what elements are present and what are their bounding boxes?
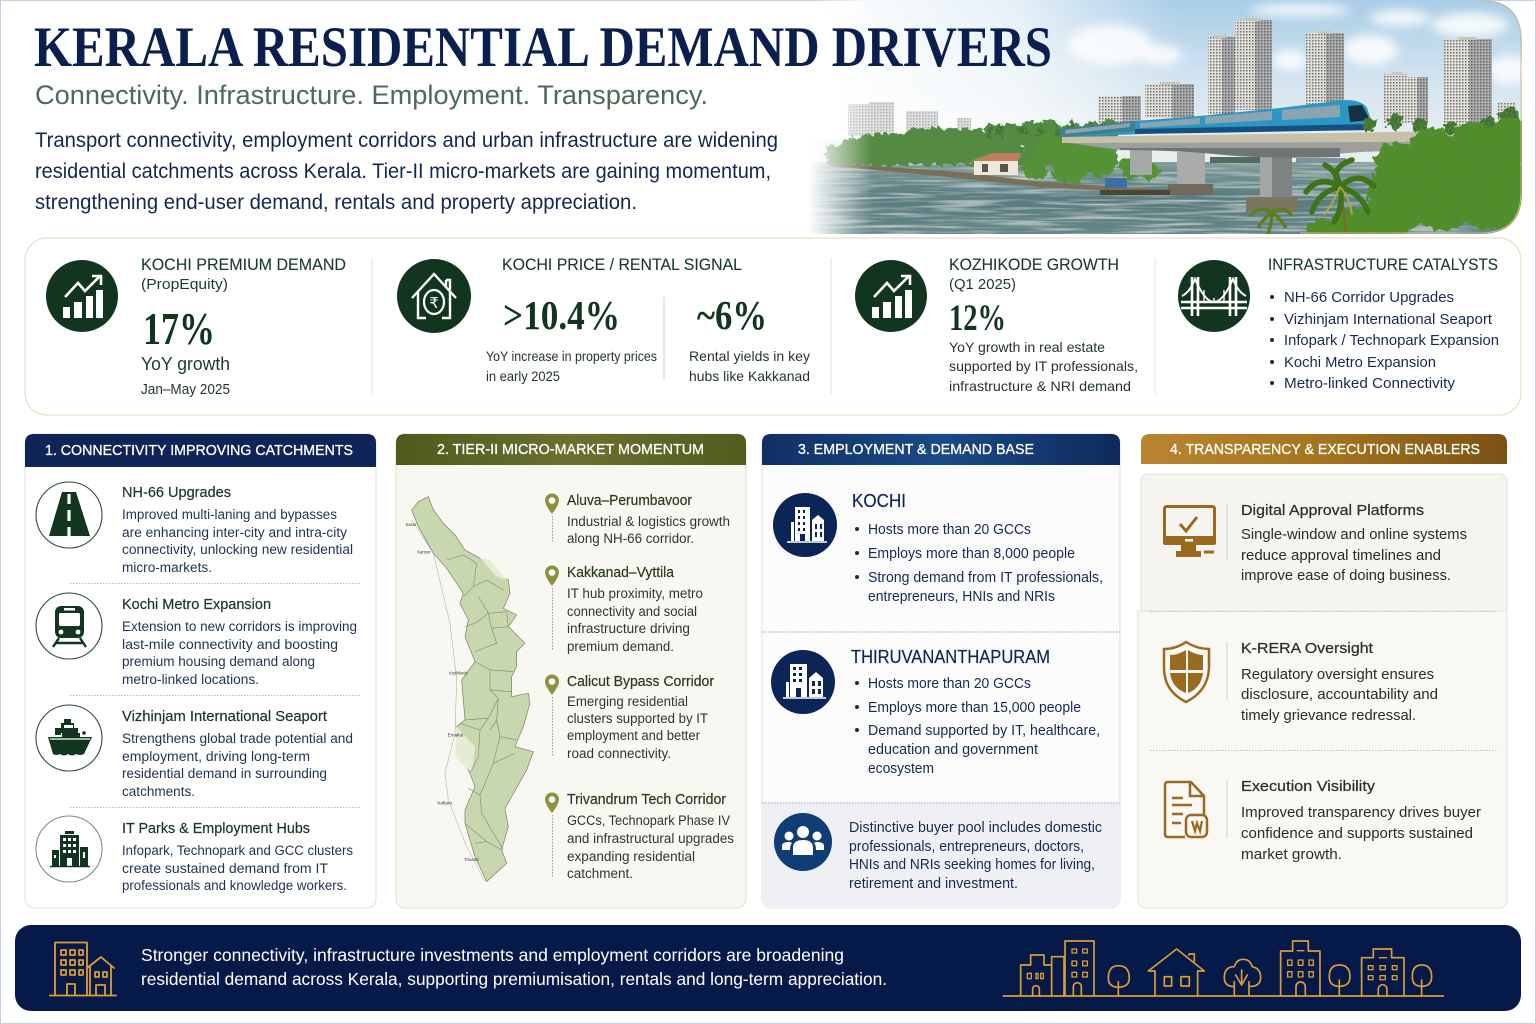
panel 1: connectivity improving catchments bbox=[25, 434, 376, 908]
item: Kakkanad-Vyttila: infrastructure driving bbox=[567, 621, 690, 636]
item: digital approval platforms: Single-window and online systems bbox=[1241, 526, 1467, 543]
KPI: infrastructure catalysts: Vizhinjam International Seaport bbox=[1284, 311, 1493, 328]
icon: location pin bbox=[545, 566, 559, 651]
subtitle: Connectivity. Infrastructure. Employment. Transparency. bbox=[35, 80, 708, 110]
map of Kerala: Kozhikode bbox=[449, 670, 468, 676]
map of Kerala: Ernakul bbox=[448, 732, 463, 738]
item: Kakkanad-Vyttila: IT hub proximity, metro bbox=[567, 586, 703, 601]
icon: growth chart bbox=[855, 260, 927, 332]
item: Vizhinjam international seaport: employment, driving long-term bbox=[122, 749, 310, 764]
panel 2: Tier-II micro-market momentum bbox=[396, 434, 746, 908]
item: Aluva-Perumbavoor: Aluva–Perumbavoor bbox=[567, 493, 692, 509]
section: distinctive buyer pool: retirement and investment. bbox=[849, 876, 1018, 892]
item: Vizhinjam international seaport: catchments. bbox=[122, 784, 195, 799]
KPI: Kozhikode growth: KOZHIKODE GROWTH bbox=[949, 255, 1119, 274]
title: KERALA RESIDENTIAL DEMAND DRIVERS bbox=[34, 16, 1052, 79]
panel 1 heading: 1. CONNECTIVITY IMPROVING CATCHMENTS bbox=[45, 442, 353, 459]
section: Thiruvananthapuram: education and government bbox=[868, 742, 1038, 758]
item: Kakkanad-Vyttila: connectivity and social bbox=[567, 604, 697, 619]
section: distinctive buyer pool: Distinctive buyer pool includes domestic bbox=[849, 820, 1102, 836]
KPI: infrastructure catalysts: Kochi Metro Expansion bbox=[1284, 354, 1436, 371]
intro paragraph: strengthening end-user demand, rentals and property appreciation. bbox=[35, 191, 637, 214]
item: Calicut bypass corridor: Calicut Bypass Corridor bbox=[567, 674, 714, 690]
KPI: Kochi price and rental signal: ~6% bbox=[697, 292, 767, 338]
section: Thiruvananthapuram: Hosts more than 20 GCCs bbox=[868, 676, 1031, 692]
map of Kerala: Kasar bbox=[406, 522, 417, 528]
icon: house with rupee bbox=[397, 259, 471, 333]
panel 4 heading bbox=[1141, 434, 1507, 464]
section: Thiruvananthapuram: ecosystem bbox=[868, 761, 934, 777]
item: NH-66 upgrades: connectivity, unlocking new residential bbox=[122, 542, 353, 557]
footer message bbox=[141, 945, 887, 989]
icon: location pin bbox=[545, 793, 559, 878]
KPI: Kochi premium demand: KOCHI PREMIUM DEMAND bbox=[141, 255, 346, 274]
item: K-RERA oversight: timely grievance redressal. bbox=[1241, 707, 1416, 724]
item: IT parks and employment hubs bbox=[36, 816, 353, 893]
KPI: Kochi premium demand: YoY growth bbox=[141, 354, 230, 374]
panel 3 heading: 3. EMPLOYMENT & DEMAND BASE bbox=[798, 441, 1034, 458]
KPI: infrastructure catalysts: Metro-linked Connectivity bbox=[1284, 375, 1455, 392]
item: NH-66 upgrades: Improved multi-laning and bypasses bbox=[122, 507, 337, 522]
KPI: Kochi price and rental signal: hubs like Kakkanad bbox=[689, 368, 810, 384]
KPI: Kozhikode growth: supported by IT professionals, bbox=[949, 358, 1138, 374]
item: Kochi metro expansion: Extension to new corridors is improving bbox=[122, 619, 357, 634]
section: Kochi: KOCHI bbox=[852, 491, 906, 511]
item: Trivandrum tech corridor bbox=[545, 792, 734, 881]
item: Trivandrum tech corridor: catchment. bbox=[567, 866, 633, 881]
footer banner bbox=[15, 925, 1521, 1011]
KPI: Kochi price and rental signal: in early 2025 bbox=[486, 368, 560, 384]
item: Vizhinjam international seaport: residential demand in surrounding bbox=[122, 766, 327, 781]
item: Calicut bypass corridor: employment and better bbox=[567, 728, 700, 743]
item: NH-66 upgrades: micro-markets. bbox=[122, 560, 212, 575]
KPI: Kozhikode growth bbox=[855, 255, 1138, 394]
section: Kochi: Strong demand from IT professionals, bbox=[868, 570, 1103, 586]
item: Aluva-Perumbavoor bbox=[545, 493, 730, 546]
section: Kochi: entrepreneurs, HNIs and NRIs bbox=[868, 589, 1055, 605]
KPI: Kochi price and rental signal: >10.4% bbox=[503, 292, 620, 338]
icon: road bbox=[36, 482, 102, 548]
KPI: Kochi price and rental signal: YoY increase in property prices bbox=[486, 348, 657, 364]
item: Kakkanad-Vyttila bbox=[545, 565, 703, 654]
panel 3: employment and demand base bbox=[762, 434, 1120, 908]
map of Kerala bbox=[406, 497, 533, 882]
KPI: infrastructure catalysts: NH-66 Corridor Upgrades bbox=[1284, 289, 1454, 306]
KPI: Kochi premium demand: (PropEquity) bbox=[141, 276, 228, 293]
metro train bbox=[1060, 100, 1373, 137]
KPI: Kochi price and rental signal: KOCHI PRICE / RENTAL SIGNAL bbox=[502, 255, 742, 274]
panel 4: transparency and execution enablers bbox=[1138, 434, 1507, 908]
item: Calicut bypass corridor: Emerging residential bbox=[567, 694, 688, 709]
item: digital approval platforms: Digital Approval Platforms bbox=[1241, 502, 1424, 519]
KPI: Kochi premium demand: 17% bbox=[143, 303, 215, 354]
section: distinctive buyer pool bbox=[774, 813, 1102, 892]
KPI strip bbox=[25, 238, 1521, 415]
item: Kochi metro expansion: metro-linked locations. bbox=[122, 672, 259, 687]
item: Vizhinjam international seaport: Strengthens global trade potential and bbox=[122, 731, 353, 746]
icon: train bbox=[36, 593, 102, 659]
item: Kakkanad-Vyttila: premium demand. bbox=[567, 639, 674, 654]
item: Kochi metro expansion: last-mile connectivity and boosting bbox=[122, 637, 338, 652]
KPI: Kochi price and rental signal bbox=[397, 255, 810, 384]
map of Kerala: Kollam bbox=[437, 800, 452, 806]
map of Kerala: Trivand bbox=[464, 857, 479, 863]
KPI: infrastructure catalysts bbox=[1178, 255, 1499, 392]
section: Thiruvananthapuram: Employs more than 15,000 people bbox=[868, 700, 1081, 716]
item: NH-66 upgrades: NH-66 Upgrades bbox=[122, 485, 231, 501]
section: Thiruvananthapuram: Demand supported by IT, healthcare, bbox=[868, 723, 1100, 739]
item: Trivandrum tech corridor: GCCs, Technopark Phase IV bbox=[567, 813, 730, 828]
item: Vizhinjam international seaport: Vizhinjam International Seaport bbox=[122, 709, 327, 725]
icon: house with rupee: ₹ bbox=[429, 295, 439, 312]
icon: gold buildings bbox=[50, 942, 116, 996]
KPI: Kochi premium demand bbox=[46, 255, 346, 398]
item: IT parks and employment hubs: IT Parks & Employment Hubs bbox=[122, 821, 310, 837]
section: Kochi bbox=[773, 491, 1103, 605]
footer message: Stronger connectivity, infrastructure investments and employment corridors are broadening bbox=[141, 945, 844, 965]
item: execution visibility: market growth. bbox=[1241, 846, 1342, 863]
item: execution visibility bbox=[1165, 778, 1481, 863]
item: K-RERA oversight: Regulatory oversight ensures bbox=[1241, 666, 1434, 683]
item: NH-66 upgrades: are enhancing inter-city and intra-city bbox=[122, 525, 347, 540]
icon: people group bbox=[774, 813, 832, 871]
KPI: infrastructure catalysts: INFRASTRUCTURE CATALYSTS bbox=[1268, 255, 1498, 274]
icon: city buildings bbox=[773, 493, 837, 557]
KPI: Kozhikode growth: 12% bbox=[949, 298, 1006, 339]
item: digital approval platforms: reduce approval timelines and bbox=[1241, 547, 1441, 564]
item: NH-66 upgrades bbox=[36, 482, 353, 575]
section: Kochi: Employs more than 8,000 people bbox=[868, 546, 1075, 562]
panel 3 heading bbox=[762, 434, 1120, 465]
item: Trivandrum tech corridor: Trivandrum Tech Corridor bbox=[567, 792, 726, 808]
item: digital approval platforms bbox=[1163, 502, 1467, 584]
icon: office building bbox=[36, 816, 102, 882]
item: Aluva-Perumbavoor: along NH-66 corridor. bbox=[567, 531, 694, 546]
item: Aluva-Perumbavoor: Industrial & logistics growth bbox=[567, 514, 730, 529]
section: Thiruvananthapuram bbox=[771, 647, 1100, 777]
item: IT parks and employment hubs: professionals and knowledge workers. bbox=[122, 878, 347, 893]
icon: monitor with check bbox=[1163, 506, 1216, 557]
icon: location pin bbox=[545, 494, 559, 543]
section: distinctive buyer pool: HNIs and NRIs seeking homes for living, bbox=[849, 857, 1095, 873]
item: Calicut bypass corridor bbox=[545, 674, 714, 761]
panel 2 heading bbox=[396, 434, 746, 465]
icon: location pin bbox=[545, 674, 559, 757]
illustration: gold skyline bbox=[1003, 941, 1443, 996]
map of Kerala: Kannur bbox=[417, 549, 431, 555]
item: Vizhinjam international seaport bbox=[36, 705, 353, 799]
item: Kakkanad-Vyttila: Kakkanad–Vyttila bbox=[567, 565, 675, 581]
section: Thiruvananthapuram: THIRUVANANTHAPURAM bbox=[851, 647, 1050, 667]
icon: suspension bridge bbox=[1178, 260, 1250, 332]
section: distinctive buyer pool: professionals, entrepreneurs, doctors, bbox=[849, 839, 1084, 855]
item: Calicut bypass corridor: road connectivity. bbox=[567, 746, 671, 761]
KPI: infrastructure catalysts: Infopark / Technopark Expansion bbox=[1284, 332, 1499, 349]
hero image: metro bridge over backwater with towers bbox=[811, 0, 1522, 234]
panel 1 heading bbox=[25, 434, 376, 467]
icon: city buildings bbox=[771, 650, 835, 714]
KPI: Kozhikode growth: YoY growth in real estate bbox=[949, 339, 1105, 355]
item: execution visibility: Execution Visibility bbox=[1241, 778, 1376, 795]
item: Kochi metro expansion: premium housing demand along bbox=[122, 654, 315, 669]
KPI: Kozhikode growth: (Q1 2025) bbox=[949, 276, 1016, 293]
item: IT parks and employment hubs: create sustained demand from IT bbox=[122, 861, 328, 876]
KPI: Kochi premium demand: Jan–May 2025 bbox=[141, 382, 230, 398]
section: Kochi: Hosts more than 20 GCCs bbox=[868, 522, 1031, 538]
item: Trivandrum tech corridor: and infrastructural upgrades bbox=[567, 831, 734, 846]
footer message: residential demand across Kerala, supporting premiumisation, rentals and long-term appreciation. bbox=[141, 969, 887, 989]
item: Kochi metro expansion: Kochi Metro Expansion bbox=[122, 597, 271, 613]
panel 4 heading: 4. TRANSPARENCY & EXECUTION ENABLERS bbox=[1170, 441, 1480, 458]
item: K-RERA oversight bbox=[1164, 640, 1438, 724]
KPI: Kochi price and rental signal: Rental yields in key bbox=[689, 348, 810, 364]
panel 2 heading: 2. TIER-II MICRO-MARKET MOMENTUM bbox=[437, 441, 704, 458]
item: digital approval platforms: improve ease of doing business. bbox=[1241, 567, 1451, 584]
item: Trivandrum tech corridor: expanding residential bbox=[567, 849, 695, 864]
item: execution visibility: Improved transparency drives buyer bbox=[1241, 804, 1481, 821]
intro paragraph bbox=[35, 129, 778, 214]
KPI: Kozhikode growth: infrastructure & NRI demand bbox=[949, 378, 1131, 394]
icon: document with seal bbox=[1165, 782, 1207, 837]
icon: ship bbox=[36, 705, 102, 771]
item: K-RERA oversight: K-RERA Oversight bbox=[1241, 640, 1374, 657]
intro paragraph: Transport connectivity, employment corridors and urban infrastructure are widening bbox=[35, 129, 778, 152]
item: IT parks and employment hubs: Infopark, Technopark and GCC clusters bbox=[122, 843, 353, 858]
icon: shield bbox=[1164, 642, 1209, 702]
item: Kochi metro expansion bbox=[36, 593, 357, 687]
item: execution visibility: confidence and supports sustained bbox=[1241, 825, 1473, 842]
item: K-RERA oversight: disclosure, accountability and bbox=[1241, 686, 1438, 703]
intro paragraph: residential catchments across Kerala. Tier-II micro-markets are gaining momentum, bbox=[35, 160, 771, 183]
icon: rising bar chart bbox=[46, 260, 118, 332]
item: Calicut bypass corridor: clusters supported by IT bbox=[567, 711, 708, 726]
